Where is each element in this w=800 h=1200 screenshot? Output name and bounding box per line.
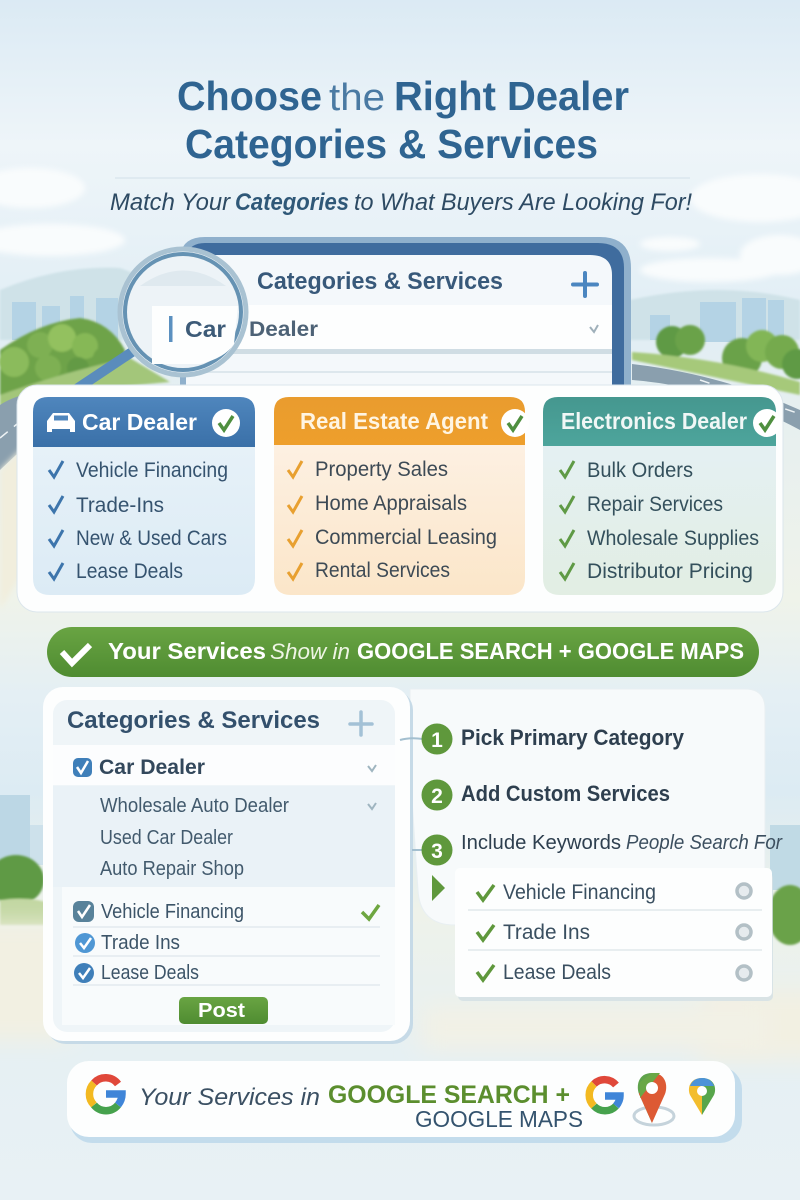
icon: map pin with ring: [634, 1073, 674, 1125]
list: car services: Vehicle Financing: [76, 459, 228, 482]
step 3: People Search For: [626, 832, 783, 854]
icon: check badge: [212, 409, 240, 437]
list: category options: Used Car Dealer: [100, 827, 233, 849]
row: car dealer: [53, 745, 395, 785]
panel: steps background: [410, 689, 765, 925]
list: real estate services: Rental Services: [315, 559, 450, 582]
list: category options: Wholesale Auto Dealer: [100, 795, 289, 817]
icon: banner check: [62, 645, 90, 663]
right trees: [632, 325, 800, 395]
step 2: Add Custom Services: [461, 781, 670, 806]
search value: Dealer: [249, 318, 318, 341]
button: post: Post: [198, 1000, 245, 1022]
list: category options: [53, 786, 395, 887]
icon: check badge: [501, 409, 529, 437]
panel: bottom google callout: Your Services in: [139, 1084, 320, 1111]
panel: bottom google callout: [67, 1061, 742, 1143]
icon: maps pin: [689, 1078, 715, 1115]
left trees and hill: [0, 318, 170, 420]
list: selected services: Vehicle Financing: [101, 901, 244, 923]
dropdown arrow: [590, 325, 598, 332]
add icon: [350, 712, 372, 735]
list: selected services: Lease Deals: [101, 962, 199, 984]
card: car dealer: [33, 397, 255, 595]
step 1: Pick Primary Category: [461, 725, 685, 750]
subtitle: [110, 178, 692, 216]
list: real estate services: [288, 458, 497, 582]
step 3: Include Keywords: [461, 832, 621, 854]
device heading: Categories & Services: [257, 268, 503, 295]
icon: google g: [89, 1078, 122, 1111]
card: real estate agent: Real Estate Agent: [300, 408, 488, 434]
step 2: 2: [431, 785, 443, 808]
panel: bottom google callout: GOOGLE MAPS: [415, 1106, 583, 1132]
roads: [0, 364, 800, 470]
step 2: [422, 780, 670, 810]
icon: google g large: [589, 1080, 620, 1111]
step 3: 3: [431, 840, 443, 863]
icon: car: [47, 413, 75, 432]
list: electronics services: Distributor Pricing: [587, 560, 753, 583]
keyword rows: Vehicle Financing: [503, 881, 656, 904]
step 1: 1: [431, 729, 443, 752]
list: car services: [49, 459, 228, 583]
banner: services in google: GOOGLE SEARCH + GOOGLE MAPS: [357, 638, 744, 664]
title: Right Dealer: [394, 73, 629, 119]
subtitle: Categories: [235, 189, 349, 216]
row: car dealer: Car Dealer: [99, 756, 205, 779]
panel: keyword list: [455, 868, 773, 1001]
title: [177, 73, 629, 167]
add icon: [573, 273, 597, 296]
step connector arrows: [400, 738, 424, 850]
form heading: Categories & Services: [67, 707, 320, 734]
subtitle: Match Your: [110, 189, 231, 216]
list: selected services: Trade Ins: [101, 932, 180, 954]
icon: magnifying glass: [72, 249, 246, 392]
keyword rows: [477, 881, 751, 984]
card: car dealer: Car Dealer: [82, 409, 197, 435]
list: electronics services: Wholesale Supplies: [587, 527, 759, 550]
card: electronics dealer: [543, 397, 781, 595]
step 1: [422, 724, 685, 754]
button: post: [179, 997, 268, 1024]
step 3: [422, 832, 783, 866]
list: real estate services: Home Appraisals: [315, 492, 467, 515]
list: real estate services: Commercial Leasing: [315, 526, 497, 549]
card: electronics dealer: Electronics Dealer: [561, 408, 747, 434]
keyword rows: Trade Ins: [503, 921, 590, 944]
title: Categories & Services: [185, 121, 598, 167]
list: car services: Lease Deals: [76, 560, 183, 583]
card: real estate agent: [274, 397, 529, 595]
list: car services: New & Used Cars: [76, 527, 227, 550]
list: electronics services: Repair Services: [587, 493, 723, 516]
magnified word: Car: [185, 316, 226, 342]
banner: services in google: [47, 627, 759, 677]
title: the: [329, 77, 385, 119]
list: real estate services: Property Sales: [315, 458, 448, 481]
panel: category form: [43, 687, 413, 1044]
list: electronics services: Bulk Orders: [587, 459, 693, 482]
icon: check badge: [753, 409, 781, 437]
arrow: green pointer: [432, 875, 445, 901]
list: electronics services: [560, 459, 759, 583]
search device mockup: [180, 237, 631, 390]
banner: services in google: Show in: [270, 639, 350, 664]
list: selected services: [62, 887, 395, 1025]
subtitle: to What Buyers Are Looking For!: [354, 189, 692, 216]
banner: services in google: Your Services: [108, 638, 266, 664]
panel: category cards: [17, 385, 783, 612]
panel: bottom google callout: GOOGLE SEARCH +: [328, 1081, 570, 1109]
title: Choose: [177, 73, 322, 119]
list: car services: Trade-Ins: [76, 494, 164, 517]
list: category options: Auto Repair Shop: [100, 858, 244, 880]
keyword rows: Lease Deals: [503, 961, 611, 984]
